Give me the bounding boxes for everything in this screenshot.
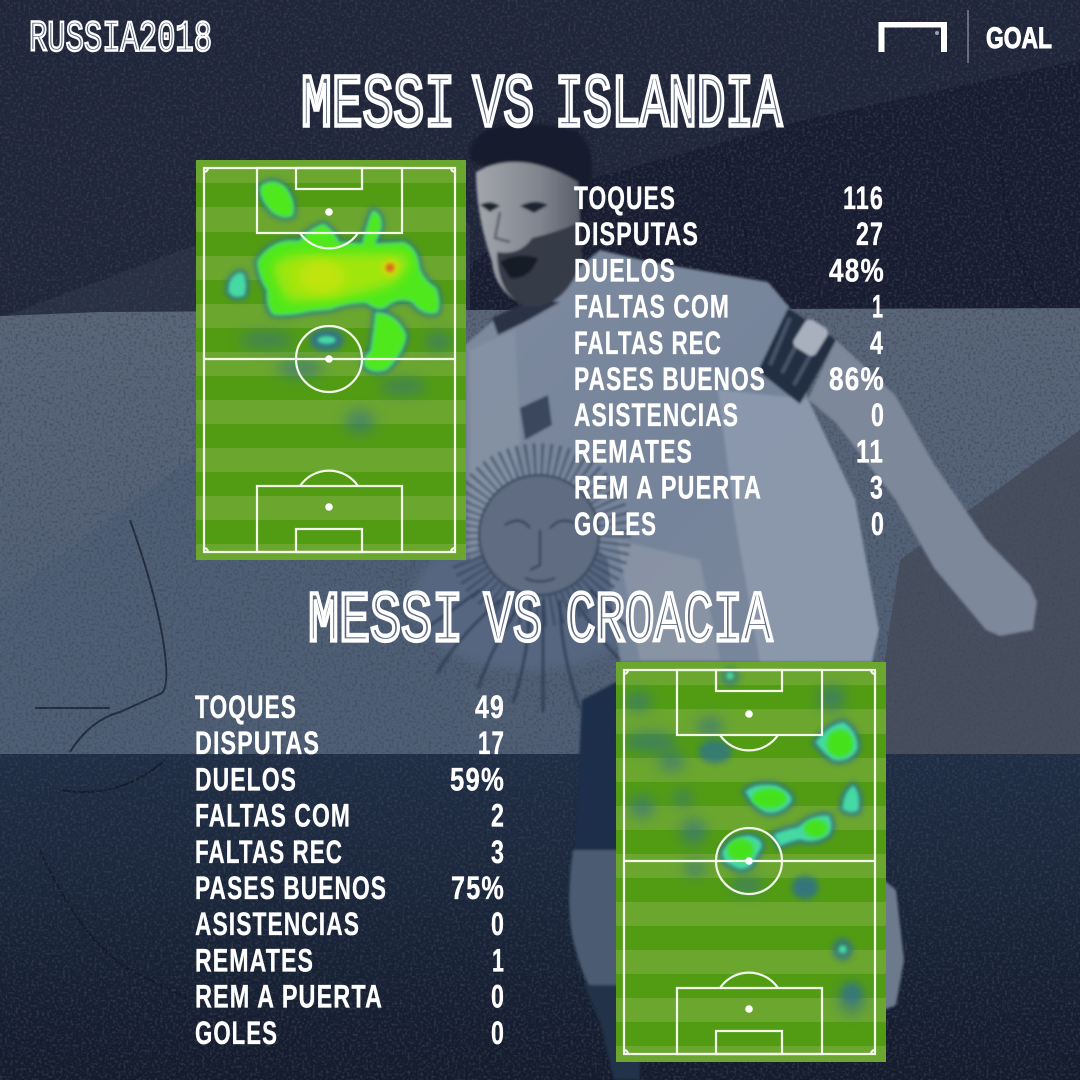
stat: faltas com: FALTAS COM [195,798,351,834]
stat: asistencias: ASISTENCIAS [195,906,360,942]
stat: toques: 49 [475,689,505,725]
panel: heatmap vs Islandia [196,160,466,560]
stats table: Islandia [574,180,885,542]
stat: asistencias: ASISTENCIAS [574,397,739,433]
stat: faltas com: FALTAS COM [574,289,730,325]
stat: rem a puerta: REM A PUERTA [195,979,383,1015]
jersey lower area behind the sun [412,530,648,670]
stat: disputas: 27 [856,216,884,252]
stat: duelos [574,252,885,288]
stat: disputas: DISPUTAS [574,216,699,252]
stat: remates: REMATES [195,942,314,978]
player jersey [465,250,879,662]
title: Messi vs Croacia: VS [484,582,542,662]
stat: remates: 1 [492,942,505,978]
stat: faltas rec: 4 [870,325,884,361]
stat: faltas com: 1 [872,289,884,325]
stat: pases buenos: 75% [451,870,505,906]
stat: disputas [195,725,505,761]
stat: toques: 116 [843,180,884,216]
heat zones Croacia [623,667,865,1015]
jersey stripes and collar [470,300,879,662]
player head [469,124,592,307]
stats table: Croacia [195,689,505,1051]
stat: asistencias: 0 [491,906,505,942]
stat: toques: TOQUES [195,689,297,725]
player legs and shorts [569,680,904,1080]
stat: pases buenos: 86% [829,361,885,397]
stat: goles: 0 [491,1015,505,1051]
stat: duelos: 48% [829,252,885,288]
stat: pases buenos: PASES BUENOS [195,870,387,906]
title: Messi vs Islandia: VS [473,64,534,148]
title: Messi vs Islandia [301,64,782,148]
stat: remates: REMATES [574,433,693,469]
icon: goal frame [878,22,947,52]
stat: remates [195,942,505,978]
stat: toques [195,689,505,725]
player: Messi silhouette [410,124,1037,1080]
stat: disputas [574,216,884,252]
stat: goles: 0 [871,506,885,542]
title: Messi vs Islandia: ISLANDIA [555,64,782,148]
stat: rem a puerta: 0 [491,979,505,1015]
stat: faltas rec: FALTAS REC [574,325,722,361]
stat: goles [195,1015,505,1051]
stat: faltas rec: FALTAS REC [195,834,343,870]
captain armband [758,308,836,404]
stat: duelos: 59% [450,761,505,797]
goal wordmark: GOAL [986,22,1052,55]
sun of May on jersey [410,459,640,712]
player arm [808,340,1037,636]
stat: faltas rec: 3 [491,834,505,870]
stat: faltas rec [574,325,884,361]
heat zones Islandia [229,183,452,434]
title: Messi vs Croacia [308,582,772,662]
stat: goles [574,506,885,542]
title: Messi vs Islandia: MESSI [301,64,455,148]
logo: Russia2018 wordmark: RUSSIA2018 [29,14,212,64]
stat: rem a puerta: 3 [870,470,884,506]
stat: duelos [195,761,505,797]
stat: duelos: DUELOS [574,252,676,288]
stat: rem a puerta: REM A PUERTA [574,470,762,506]
stat: goles: GOLES [574,506,657,542]
stat: toques: TOQUES [574,180,676,216]
stat: pases buenos: PASES BUENOS [574,361,766,397]
stat: goles: GOLES [195,1015,278,1051]
title: Messi vs Croacia: CROACIA [566,582,772,662]
panel: heatmap vs Croacia [616,662,886,1062]
stat: duelos: DUELOS [195,761,297,797]
stat: faltas rec [195,834,505,870]
stat: remates: 11 [856,433,884,469]
stat: faltas com: 2 [491,798,505,834]
stat: asistencias: 0 [871,397,885,433]
title: Messi vs Croacia: MESSI [308,582,463,662]
stat: disputas: DISPUTAS [195,725,320,761]
stat: remates [574,433,884,469]
stat: disputas: 17 [478,725,505,761]
logo: Goal [878,10,1052,63]
stat: toques [574,180,884,216]
